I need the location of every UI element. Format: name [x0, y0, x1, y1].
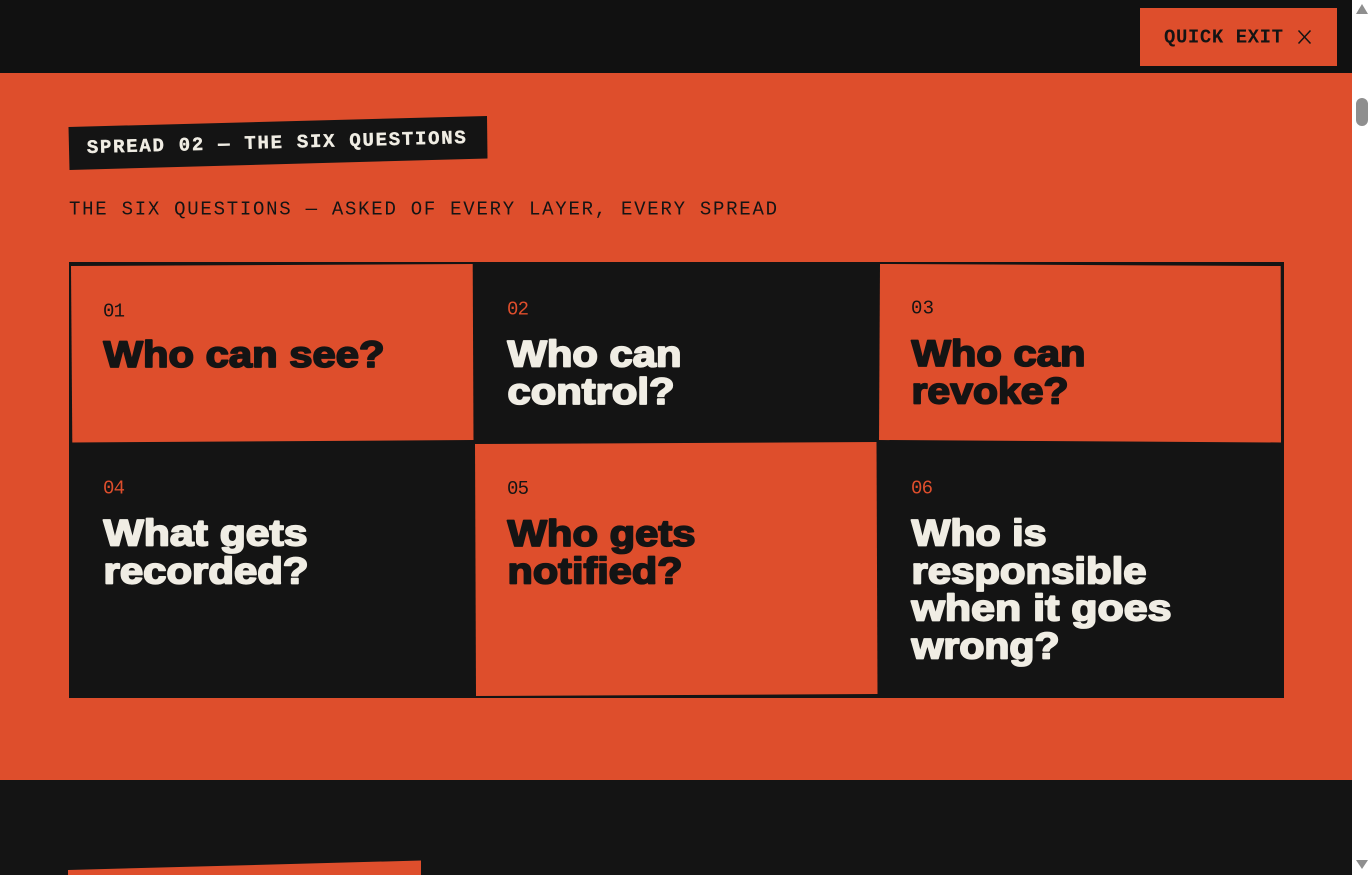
next spread tag	[68, 860, 421, 875]
question 04: What gets	[104, 512, 308, 554]
question 02: Who can	[508, 334, 682, 374]
quick exit button	[1140, 8, 1337, 66]
question 05: 05	[507, 478, 529, 500]
question 02	[507, 298, 682, 412]
question 06: responsible	[912, 550, 1146, 592]
question 05: notified?	[508, 550, 682, 592]
quick exit button: QUICK EXIT	[1164, 26, 1283, 48]
question 01: 01	[103, 300, 125, 322]
question 01	[71, 264, 474, 442]
question 06	[910, 478, 1172, 666]
question 03: 03	[911, 298, 934, 320]
question 03	[879, 264, 1281, 442]
question 05: Who gets	[508, 513, 696, 554]
spread tag: SPREAD 02 — THE SIX QUESTIONS	[87, 127, 466, 159]
question 06: wrong?	[910, 626, 1060, 666]
question grid	[69, 262, 1284, 698]
question 03: Who can	[912, 333, 1086, 374]
question 03: revoke?	[912, 370, 1068, 412]
question 06: Who is	[912, 512, 1046, 554]
top bar	[0, 0, 1352, 73]
question 04: recorded?	[104, 550, 308, 592]
subtitle: THE SIX QUESTIONS — ASKED OF EVERY LAYER, EVERY SPREAD	[69, 198, 777, 220]
question 04: 04	[103, 478, 125, 500]
question 05	[475, 442, 878, 696]
question 01: Who can see?	[104, 334, 384, 375]
spread tag	[68, 116, 488, 170]
question 06: 06	[911, 478, 933, 500]
question 06: when it goes	[910, 588, 1172, 628]
spread panel: the six questions	[0, 73, 1352, 780]
question 02: control?	[508, 371, 674, 412]
scrollbar	[1352, 0, 1372, 875]
question 04	[103, 478, 308, 592]
question 02: 02	[507, 298, 529, 320]
